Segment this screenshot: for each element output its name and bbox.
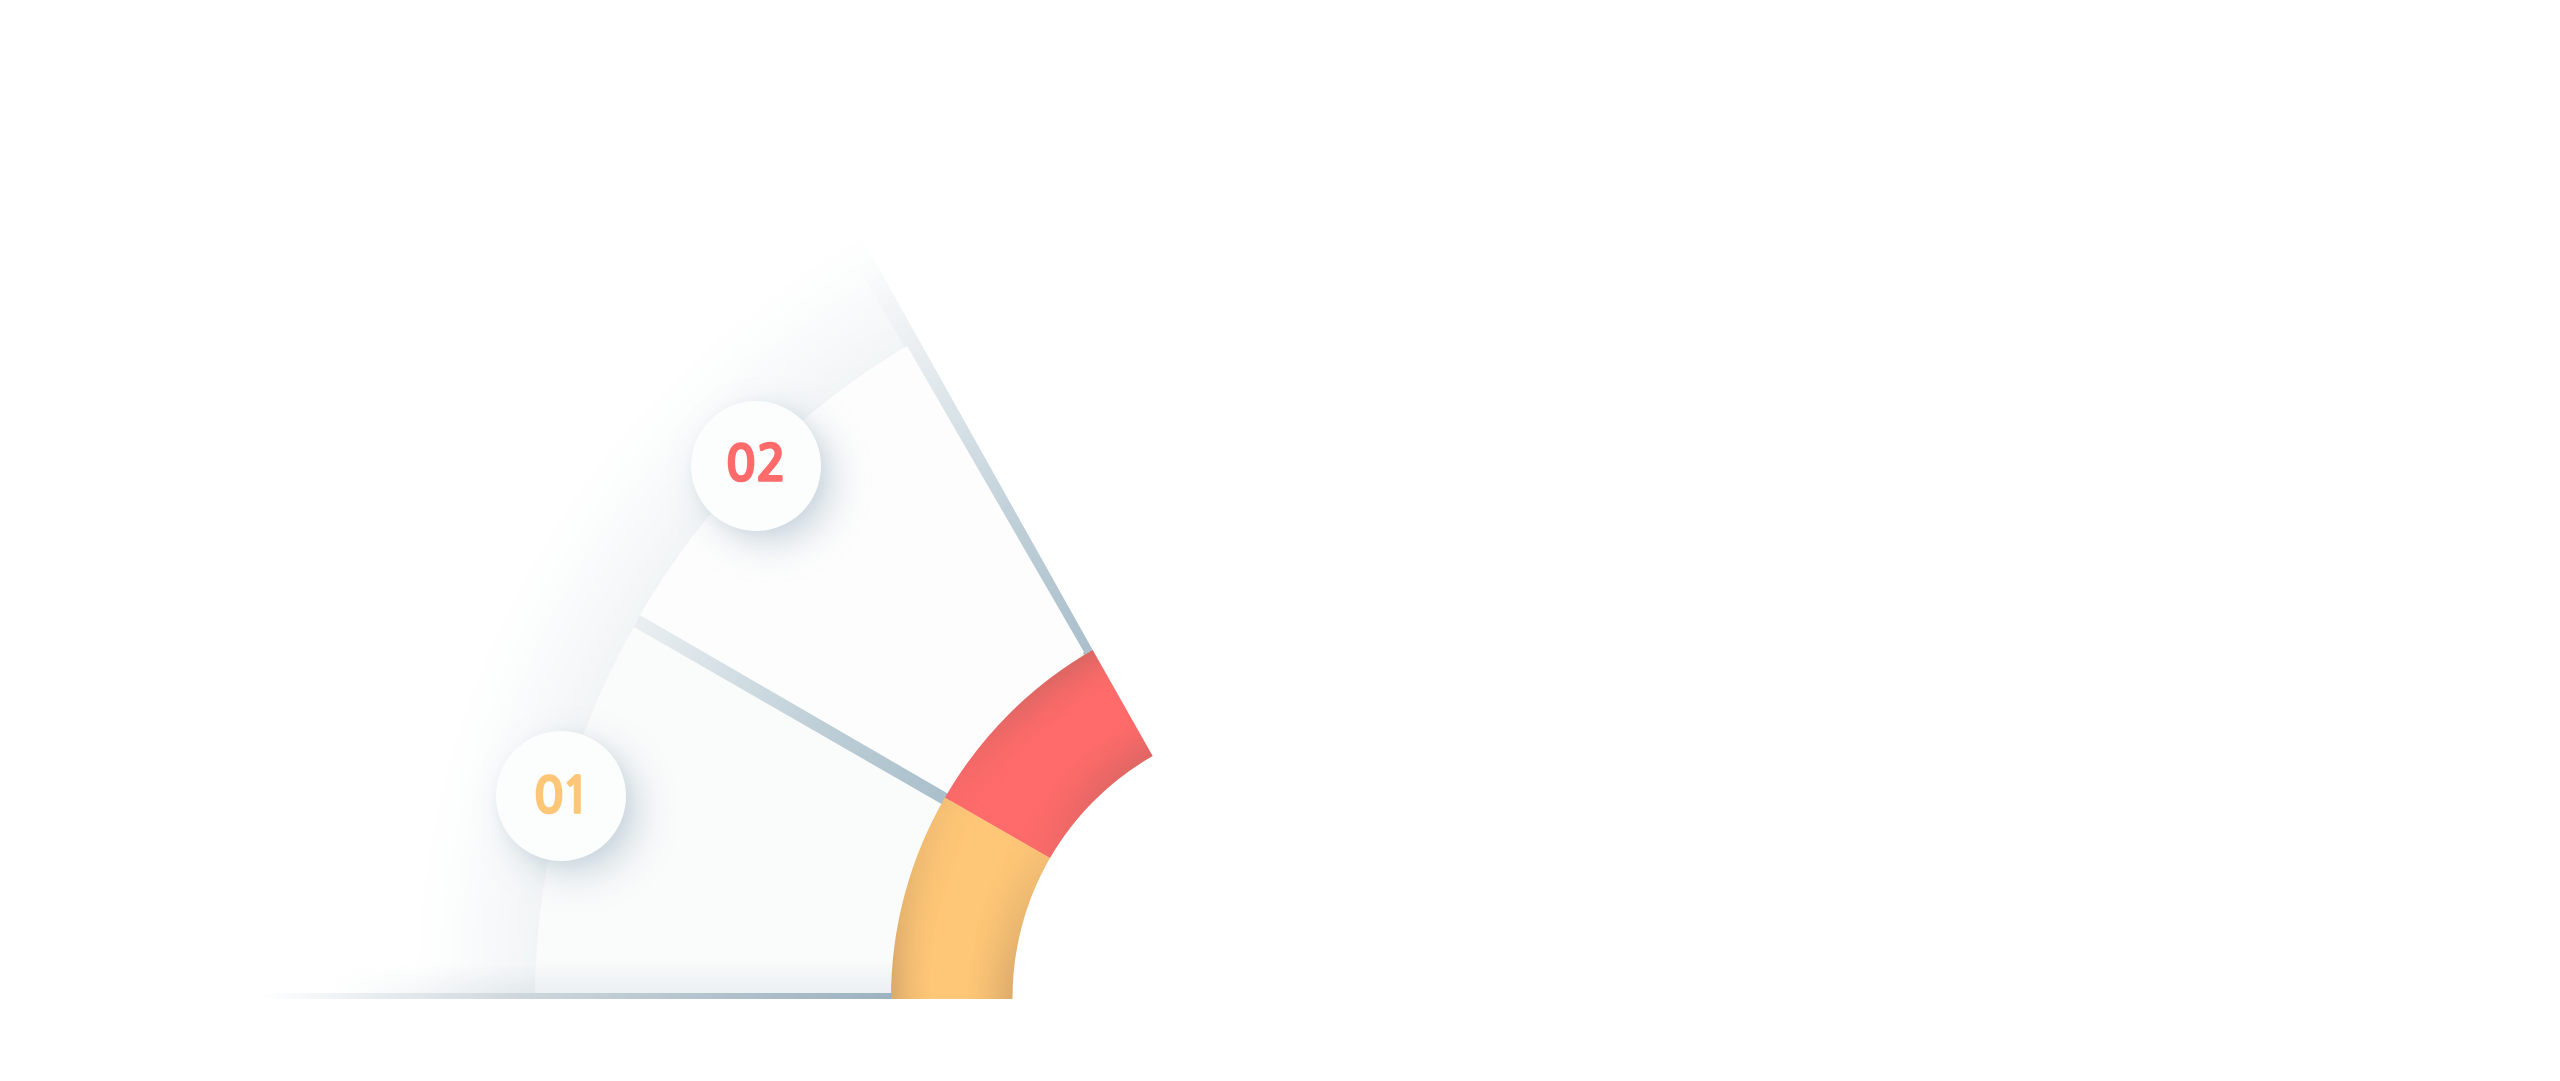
middle spoke	[634, 615, 955, 809]
bottom shadow wedge	[400, 978, 535, 993]
badge 02: 02	[726, 440, 786, 489]
bottom spoke	[260, 993, 900, 999]
badge 01: 01	[534, 772, 588, 821]
outer halo ring	[414, 235, 1093, 999]
ring segment: red	[945, 650, 1153, 858]
ring segment: yellow	[891, 798, 1050, 999]
badge 02	[691, 401, 821, 531]
badge 01	[496, 731, 626, 861]
panel: upper sector	[640, 346, 1084, 796]
panel: lower sector	[535, 627, 945, 993]
radial wheel diagram	[301, 280, 1153, 999]
right spoke	[858, 258, 1093, 655]
